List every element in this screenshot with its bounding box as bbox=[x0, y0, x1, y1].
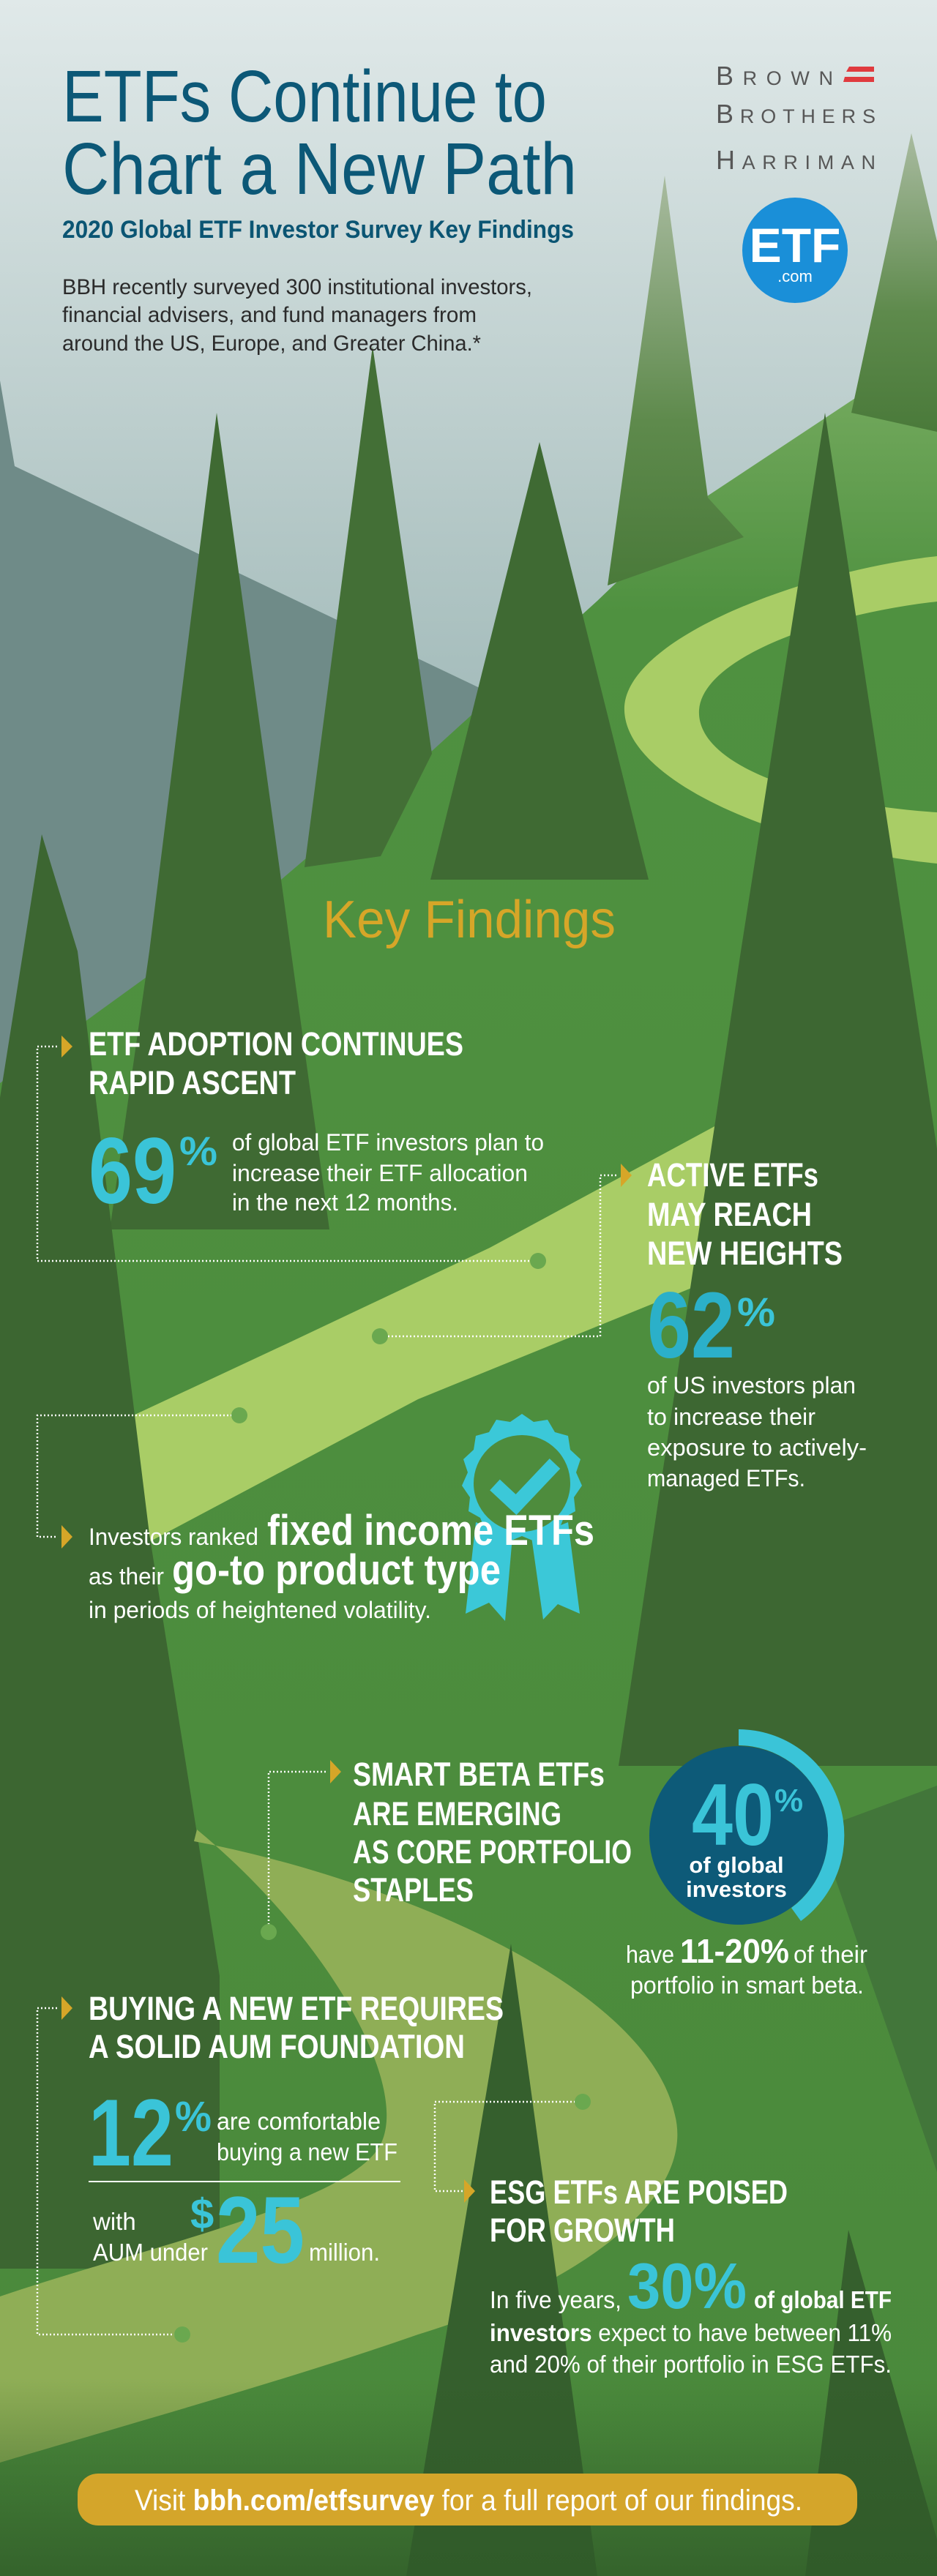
finding 2: active ETFs: % bbox=[737, 1289, 775, 1335]
finding 6: ESG: 30% bbox=[627, 2250, 747, 2322]
intro text: BBH recently surveyed 300 institutional investors, bbox=[62, 275, 532, 299]
finding 3: fixed income: in periods of heightened volatility. bbox=[89, 1597, 431, 1623]
donut chart 40% bbox=[649, 1729, 844, 1925]
logo: Brown Brothers Harriman: B ROTHERS bbox=[716, 99, 876, 129]
finding 1: ETF adoption: in the next 12 months. bbox=[232, 1189, 458, 1216]
finding 4: smart beta bbox=[261, 1729, 867, 1999]
finding 3: fixed income bbox=[37, 1407, 594, 1623]
intro text bbox=[62, 275, 532, 356]
finding 5: AUM foundation: 25 bbox=[216, 2176, 305, 2283]
finding 6: ESG: of global ETF bbox=[754, 2286, 892, 2313]
finding 2: active ETFs: MAY REACH bbox=[647, 1196, 812, 1233]
finding 2: active ETFs: exposure to actively- bbox=[647, 1434, 867, 1461]
logo: ETF.com: .com bbox=[777, 267, 813, 285]
finding 5: AUM foundation: AUM under bbox=[93, 2239, 208, 2266]
donut chart 40%: investors bbox=[686, 1876, 787, 1902]
title bbox=[62, 56, 577, 210]
finding 5: AUM foundation: 12 bbox=[89, 2079, 173, 2186]
finding 1: ETF adoption: of global ETF investors plan to bbox=[232, 1129, 544, 1156]
title: ETFs Continue to bbox=[62, 56, 547, 138]
finding 4: smart beta: AS CORE PORTFOLIO bbox=[353, 1833, 632, 1871]
finding 3: fixed income: as their bbox=[89, 1563, 164, 1590]
finding 4: smart beta: SMART BETA ETFs bbox=[353, 1756, 605, 1793]
finding 2: active ETFs: of US investors plan bbox=[647, 1372, 856, 1399]
finding 6: ESG: FOR GROWTH bbox=[490, 2212, 675, 2249]
finding 1: ETF adoption bbox=[37, 1025, 546, 1269]
finding 5: AUM foundation: BUYING A NEW ETF REQUIRES bbox=[89, 1990, 504, 2027]
finding 5: AUM foundation: are comfortable bbox=[217, 2108, 381, 2135]
finding 5: AUM foundation: buying a new ETF bbox=[217, 2138, 397, 2165]
finding 2: active ETFs bbox=[372, 1156, 867, 1491]
donut chart 40%: of global bbox=[689, 1852, 784, 1878]
finding 4: smart beta: 11-20% bbox=[680, 1932, 789, 1970]
intro text: financial advisers, and fund managers from bbox=[62, 303, 477, 327]
finding 1: ETF adoption: % bbox=[179, 1128, 217, 1174]
logo: Brown Brothers Harriman: H ARRIMAN bbox=[716, 145, 876, 175]
finding 2: active ETFs: to increase their bbox=[647, 1404, 815, 1430]
finding 4: smart beta: of their bbox=[794, 1941, 867, 1968]
logo: Brown Brothers Harriman: B ROWN bbox=[716, 61, 833, 91]
finding 4: smart beta: ARE EMERGING bbox=[353, 1795, 561, 1832]
finding 5: AUM foundation: with bbox=[92, 2208, 136, 2235]
logo: Brown Brothers Harriman bbox=[716, 61, 876, 175]
finding 5: AUM foundation: % bbox=[175, 2093, 212, 2141]
finding 6: ESG: In five years, bbox=[490, 2286, 621, 2313]
finding 6: ESG: and 20% of their portfolio in ESG ETFs. bbox=[490, 2351, 892, 2378]
finding 1: ETF adoption: RAPID ASCENT bbox=[89, 1064, 296, 1101]
title: Chart a New Path bbox=[62, 128, 577, 210]
finding 1: ETF adoption: increase their ETF allocation bbox=[232, 1160, 528, 1186]
finding 3: fixed income: go-to product type bbox=[172, 1546, 501, 1594]
finding 6: ESG bbox=[435, 2094, 892, 2378]
finding 2: active ETFs: 62 bbox=[647, 1273, 735, 1378]
finding 5: AUM foundation bbox=[37, 1990, 504, 2343]
finding 2: active ETFs: NEW HEIGHTS bbox=[647, 1235, 843, 1272]
finding 1: ETF adoption: ETF ADOPTION CONTINUES bbox=[89, 1025, 463, 1063]
finding 5: AUM foundation: $ bbox=[190, 2190, 214, 2238]
subtitle: 2020 Global ETF Investor Survey Key Findings bbox=[62, 216, 574, 244]
finding 3: fixed income: fixed income ETFs bbox=[267, 1507, 594, 1554]
finding 2: active ETFs: managed ETFs. bbox=[647, 1465, 805, 1491]
finding 5: AUM foundation: million. bbox=[309, 2239, 380, 2266]
finding 2: active ETFs: ACTIVE ETFs bbox=[647, 1156, 818, 1194]
finding 4: smart beta: have bbox=[626, 1941, 674, 1968]
icon: award ribbon bbox=[462, 1414, 582, 1621]
finding 4: smart beta: STAPLES bbox=[353, 1871, 474, 1909]
donut chart 40%: % bbox=[774, 1783, 803, 1819]
logo: ETF.com: ETF bbox=[750, 218, 840, 272]
intro text: around the US, Europe, and Greater China.* bbox=[62, 332, 481, 356]
heading: Key Findings: Key Findings bbox=[323, 891, 616, 949]
call to action button: Visit bbh.com/etfsurvey for a full report of our findings. bbox=[135, 2485, 802, 2517]
finding 6: ESG: investors expect to have between 11% bbox=[490, 2319, 892, 2346]
donut chart 40%: 40 bbox=[692, 1766, 774, 1864]
call to action button bbox=[78, 2474, 857, 2526]
finding 5: AUM foundation: A SOLID AUM FOUNDATION bbox=[89, 2028, 465, 2065]
finding 1: ETF adoption: 69 bbox=[89, 1119, 176, 1224]
logo: ETF.com bbox=[742, 198, 848, 303]
finding 6: ESG: ESG ETFs ARE POISED bbox=[490, 2174, 788, 2211]
finding 4: smart beta: portfolio in smart beta. bbox=[630, 1972, 864, 1999]
finding 3: fixed income: Investors ranked bbox=[89, 1524, 258, 1550]
